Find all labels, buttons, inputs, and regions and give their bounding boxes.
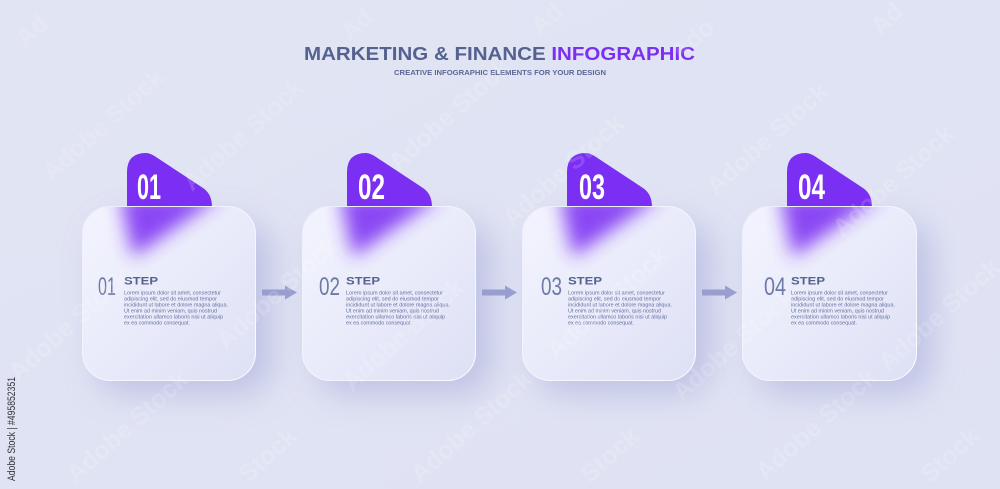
body text 1: ex ea commodo consequat. [124,320,190,326]
badge 1 [127,153,212,207]
body text 1 [124,290,228,326]
glass card 1 [82,206,256,381]
watermark pattern: Adobe Stock [541,241,674,364]
body text 3 [568,290,672,326]
badge number 3: 03 [579,168,605,207]
watermark pattern: Adobe Stock [211,231,344,354]
body text 2: adipiscing elit, sed do eiusmod tempor [346,296,439,302]
watermark pattern: Adobe Stock [3,263,136,386]
arrow 2 to 3 [482,286,517,300]
step heading 2: STEP [346,276,380,288]
watermark pattern: Adobe Stock [667,283,800,406]
watermark pattern: Adobe Stock [497,109,630,232]
watermark pattern: Adobe Stock [61,365,194,488]
glass card 2 [302,206,476,381]
watermark pattern: Adobe Stock [177,73,310,196]
watermark pattern: Adobe Stock [383,53,516,176]
watermark pattern: Adobe Stock [337,273,470,396]
card shadow 1 [96,222,272,394]
badge number 4: 04 [798,168,825,207]
watermark pattern: Adobe Stock [405,365,538,488]
purple glow 1 [120,195,222,257]
body text 3: ex ea commodo consequat. [568,320,634,326]
badge 3 [567,153,652,207]
watermark pattern: Adobe Stock [750,363,883,486]
subtitle: CREATIVE INFOGRAPHIC ELEMENTS FOR YOUR DESIGN [394,68,606,77]
card shadow 3 [536,222,712,394]
badge 4 [787,153,872,207]
watermark pattern: Stock [233,422,303,488]
watermark pattern: Stock [575,422,645,488]
body text 2: exercitation ullamco laboris nisi ut aliquip [346,314,445,320]
purple glow 4 [780,195,882,257]
panel: step 2 [302,153,492,394]
glass card 3 [522,206,696,381]
step number 4: 04 [764,273,786,301]
step heading 3: STEP [568,276,602,288]
panel: step 3 [522,153,712,394]
purple glow 2 [340,195,442,257]
watermark pattern: Stock [915,422,985,488]
step number 2: 02 [319,273,340,301]
body text 2: ex ea commodo consequat. [346,320,412,326]
watermark pattern: Adobe Stock [827,119,960,242]
body text 3: Lorem ipsum dolor sit amet, consectetur [568,290,665,296]
watermark pattern: Adobe Stock [701,77,834,200]
body text 4: adipiscing elit, sed do eiusmod tempor [791,296,884,302]
watermark pattern: Adobe Stock [37,63,170,186]
badge 2 [347,153,432,207]
stock image id: Adobe Stock | #495852351 [6,377,18,481]
body text 2: Lorem ipsum dolor sit amet, consectetur [346,290,443,296]
body text 4: incididunt ut labore et dolore magna aliqua. [791,302,895,308]
body text 2: Ut enim ad minim veniam, quis nostrud [346,308,439,314]
step number 3: 03 [541,273,562,301]
watermark pattern: Ad [10,9,54,52]
body text 1: adipiscing elit, sed do eiusmod tempor [124,296,217,302]
title: MARKETING & FINANCE INFOGRAPHIC [304,44,695,64]
panel: step 4 [742,153,932,394]
badge number 1: 01 [137,168,161,207]
panel: step 1 [82,153,272,394]
body text 4: Ut enim ad minim veniam, quis nostrud [791,308,884,314]
card shadow 2 [316,222,492,394]
arrow 1 to 2 [262,286,297,300]
body text 1: exercitation ullamco laboris nisi ut aliquip [124,314,223,320]
watermark pattern: Ad [335,3,379,46]
body text 3: adipiscing elit, sed do eiusmod tempor [568,296,661,302]
card shadow 4 [756,222,932,394]
body text 3: exercitation ullamco laboris nisi ut aliquip [568,314,667,320]
step heading 4: STEP [791,276,825,288]
glass card 4 [742,206,917,381]
step heading 1: STEP [124,276,158,288]
badge number 2: 02 [358,168,385,207]
purple glow 3 [560,195,662,257]
body text 1: incididunt ut labore et dolore magna aliqua. [124,302,228,308]
body text 1: Ut enim ad minim veniam, quis nostrud [124,308,217,314]
body text 4: Lorem ipsum dolor sit amet, consectetur [791,290,888,296]
body text 4 [791,290,895,326]
body text 2 [346,290,450,326]
arrow 3 to 4 [702,286,737,300]
body text 4: ex ea commodo consequat. [791,320,857,326]
body text 3: Ut enim ad minim veniam, quis nostrud [568,308,661,314]
step number 1: 01 [98,273,116,301]
body text 3: incididunt ut labore et dolore magna aliqua. [568,302,672,308]
body text 2: incididunt ut labore et dolore magna aliqua. [346,302,450,308]
body text 1: Lorem ipsum dolor sit amet, consectetur [124,290,221,296]
body text 4: exercitation ullamco laboris nisi ut aliquip [791,314,890,320]
watermark pattern: Ado [665,13,720,66]
